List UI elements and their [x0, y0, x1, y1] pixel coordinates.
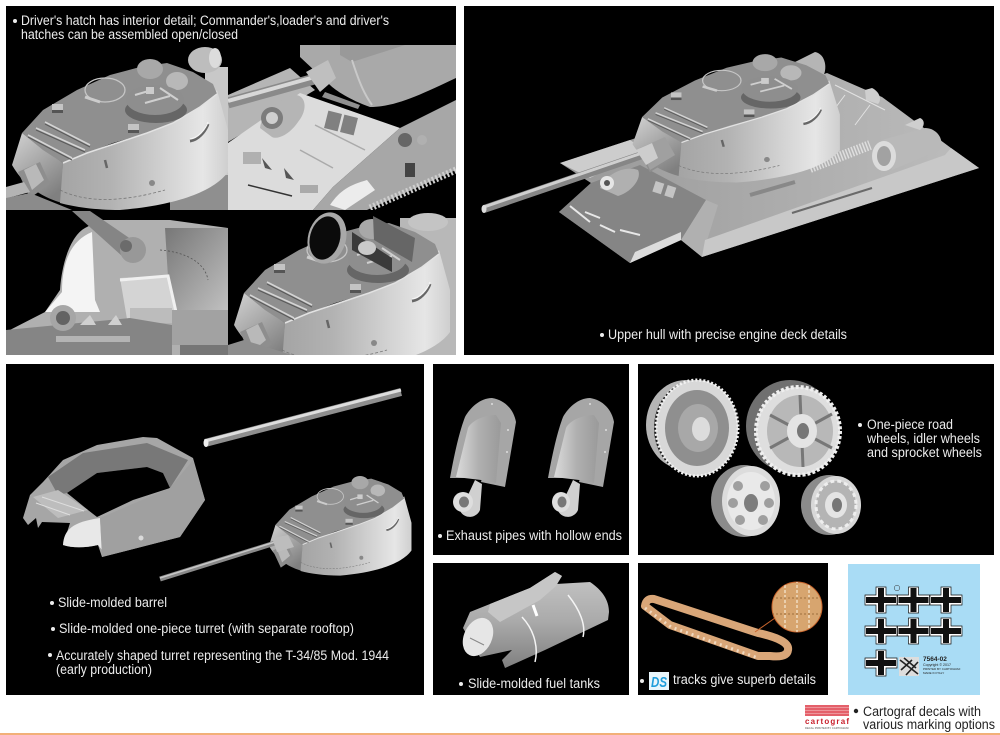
- text: decal sheet legal: Copyright © 2017: [923, 663, 951, 667]
- image: hull front deck: [228, 45, 456, 210]
- image: turret open hatches: [228, 212, 456, 355]
- panel: fuel tanks: [433, 563, 629, 695]
- caption: one-piece turret: Slide-molded one-piece turret (with separate rooftop): [59, 621, 354, 636]
- panel: wheels: [638, 364, 994, 555]
- caption: accurate turret shape: (early production): [56, 662, 152, 677]
- panel: upper hull: [464, 6, 994, 355]
- caption: slide-molded barrel: Slide-molded barrel: [58, 595, 167, 610]
- image: assembled turret: [160, 476, 411, 579]
- panel: hatches: [6, 6, 456, 370]
- image: track loop: [645, 599, 788, 658]
- caption: wheels: and sprocket wheels: [867, 445, 982, 460]
- caption: wheels: [858, 417, 982, 460]
- image: upper hull with turret: [482, 52, 979, 263]
- icon: fuel tanks on hull: [795, 52, 942, 171]
- heading: hatch detail note: hatches can be assembled open/closed: [21, 27, 238, 42]
- image: loose barrel: [204, 390, 401, 447]
- image: interior view of driver's hatch: [6, 211, 228, 355]
- caption: accurate turret shape: [48, 648, 389, 677]
- icon: decal emblem: [899, 657, 919, 676]
- icon: barrel: [482, 151, 648, 213]
- caption: accurate turret shape: Accurately shaped turret representing the T-34/85 Mod. 1944: [56, 648, 389, 663]
- text: decal sheet legal: PRINTED BY CARTOGRAF: [923, 667, 961, 671]
- panel: tracks: [638, 563, 828, 695]
- icon: number 1: [894, 585, 900, 591]
- icon: open hatch lid: [307, 212, 346, 264]
- image: fuel tank: [457, 572, 609, 668]
- panel: exhaust pipes: [433, 364, 629, 555]
- caption: wheels: One-piece road: [867, 417, 953, 432]
- panel: decal sheet: [848, 564, 980, 695]
- icon: crosses: [865, 587, 962, 676]
- caption: cartograf decals: [854, 704, 995, 732]
- text: decal sheet legal: MADE IN ITALY: [923, 671, 944, 675]
- heading: hatch detail note: Driver's hatch has interior detail; Commander's,loader's and driver's: [21, 13, 389, 28]
- icon: driver hatch dome: [600, 169, 639, 196]
- logo: cartograf: cartograf: [805, 717, 849, 726]
- caption: exhaust pipes: Exhaust pipes with hollow ends: [446, 528, 622, 543]
- image: small wheel: [801, 475, 861, 535]
- text: decal sheet legal: 7564-02: [923, 656, 947, 663]
- caption: upper hull: Upper hull with precise engine deck details: [608, 327, 847, 342]
- image: road wheel: [646, 380, 738, 476]
- logo: cartograf: [805, 705, 849, 730]
- caption: DS tracks: [640, 672, 816, 691]
- caption: cartograf decals: Cartograf decals with: [863, 704, 981, 719]
- image: sprocket wheel: [746, 380, 840, 475]
- panel: turret parts: [6, 364, 424, 695]
- image: right exhaust pipe: [548, 398, 614, 517]
- icon: DS logo: DS: [651, 674, 667, 691]
- caption: fuel tanks: Slide-molded fuel tanks: [468, 676, 600, 691]
- image: turret shell: [23, 437, 205, 557]
- callout: track detail lens: [755, 580, 822, 635]
- caption: wheels: wheels, idler wheels: [866, 431, 980, 446]
- heading: hatch detail note: [13, 13, 389, 42]
- logo: cartograf: DECAL PRINTED BY CARTOGRAF: [805, 726, 849, 730]
- image: turret closed hatches: [6, 47, 228, 210]
- text: decal sheet legal: [923, 656, 961, 675]
- image: idler wheel: [711, 465, 780, 537]
- caption: DS tracks: tracks give superb details: [673, 672, 816, 687]
- image: left exhaust pipe: [450, 398, 516, 517]
